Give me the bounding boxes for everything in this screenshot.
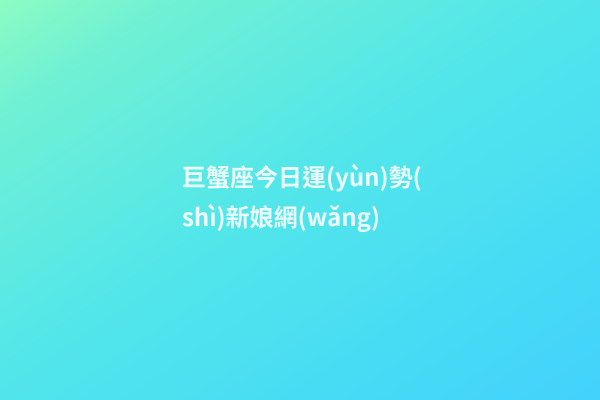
title: shì)新娘網(wǎng) — [182, 198, 380, 233]
title — [182, 158, 422, 233]
title: 巨蟹座今日運(yùn)勢( — [182, 158, 422, 193]
